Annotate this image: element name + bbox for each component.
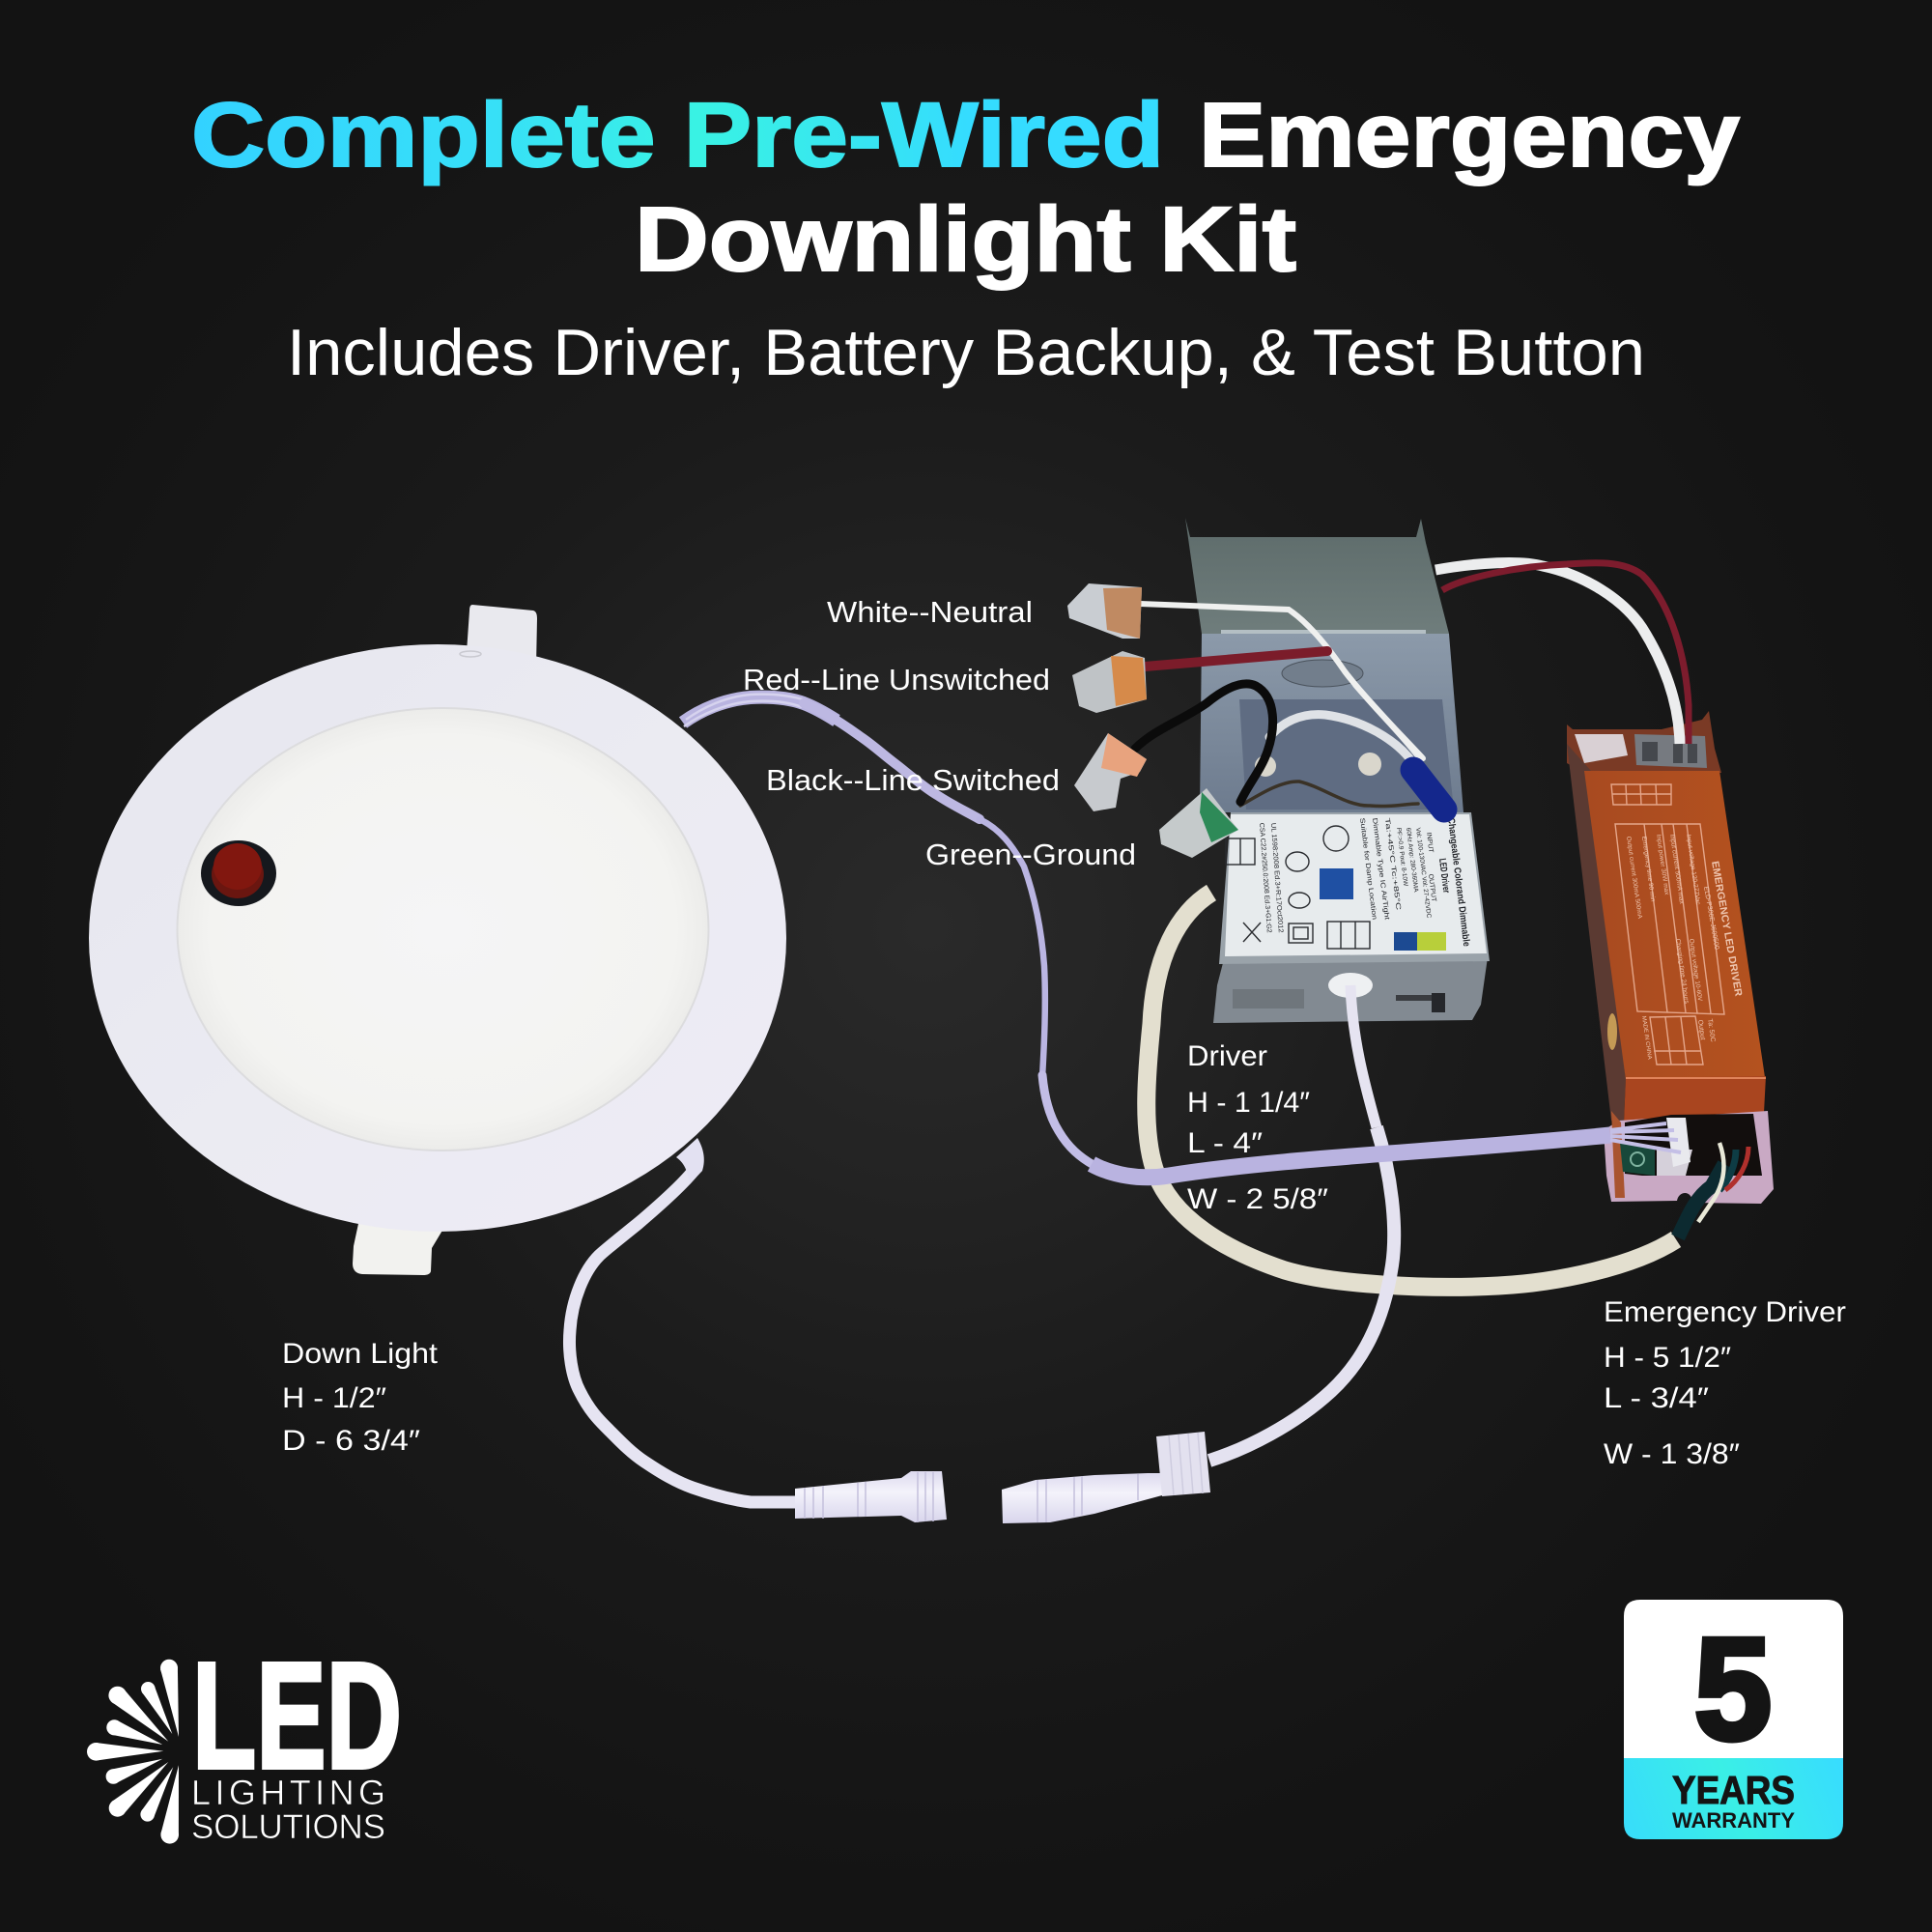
mounting tab top	[466, 605, 537, 667]
junction box driver	[1185, 518, 1490, 1023]
title: cyan part: Complete Pre-Wired	[191, 84, 1164, 186]
white neutral wire	[1140, 604, 1423, 758]
emergency driver	[1567, 711, 1774, 1237]
printed product name: Charging time 24 hours	[1674, 938, 1690, 1005]
logo sunburst icon	[87, 1660, 179, 1844]
printed product name: ELD-P306E-J600500	[1702, 886, 1719, 951]
subtitle: Includes Driver, Battery Backup, & Test Button	[287, 316, 1645, 389]
top tray	[1567, 711, 1721, 773]
blue logo	[1320, 868, 1353, 899]
grommet	[1328, 973, 1373, 998]
tail wires	[1678, 1143, 1748, 1237]
label text: 60Hz Amp: 280-360MA	[1405, 827, 1419, 894]
label symbols	[1226, 826, 1370, 949]
green connector	[1159, 788, 1238, 858]
downlight cable	[569, 1138, 797, 1502]
ground wire	[1240, 781, 1418, 807]
red line wire	[1145, 651, 1327, 667]
printed spec tables	[1611, 784, 1724, 1065]
label text: Dimmable Type IC AirTight	[1371, 817, 1390, 921]
label text: Suitable for Damp Location	[1358, 817, 1378, 921]
diffuser lens	[178, 708, 709, 1151]
back panel	[1185, 518, 1449, 634]
printed product name	[1625, 834, 1745, 1060]
label text: UL 1598:2008 Ed.3+R:17Oct2012	[1269, 823, 1284, 933]
green circuit board	[1620, 1143, 1655, 1176]
black connector	[1074, 733, 1147, 811]
label: white neutral: White--Neutral	[827, 595, 1033, 629]
label text: OUTPUT	[1427, 873, 1437, 903]
energy colour tag	[1394, 932, 1446, 951]
mounting tab bottom	[353, 1219, 449, 1275]
label: green ground: Green--Ground	[925, 838, 1136, 871]
label: red line: Red--Line Unswitched	[743, 663, 1050, 696]
label text: LED Driver	[1436, 858, 1451, 894]
dimensions: down light: Down Light	[282, 1338, 439, 1370]
logo wordmark LED: LED	[192, 1632, 402, 1801]
downlight panel	[89, 605, 786, 1275]
dimensions: down light: D - 6 3/4″	[282, 1425, 420, 1457]
dimensions: driver: H - 1 1/4″	[1187, 1087, 1310, 1119]
top label face	[1584, 771, 1765, 1080]
label: black line: Black--Line Switched	[766, 763, 1060, 797]
label text: Vol: 100-130VAC Vol: 27-42VDC	[1414, 827, 1432, 919]
printed product name: MADE IN CHINA	[1640, 1015, 1652, 1060]
logo wordmark SOLUTIONS: SOLUTIONS	[191, 1808, 385, 1846]
badge cyan bottom	[1624, 1758, 1843, 1839]
knockout oval	[1282, 660, 1363, 687]
printed product name: Output	[1696, 1019, 1706, 1040]
connector plug left	[795, 1471, 947, 1522]
title: second line: Downlight Kit	[635, 188, 1296, 291]
outer ring	[89, 644, 786, 1232]
label text: CSA C22.2#250.0:2008 Ed.3+G1:G2	[1258, 823, 1272, 933]
box lower section	[1213, 957, 1488, 1023]
top wires to emergency driver	[1435, 563, 1689, 744]
bottom end tray with notch	[1604, 1111, 1774, 1204]
title: white part: Emergency	[1199, 84, 1740, 186]
dimensions: driver	[1187, 1040, 1328, 1215]
printed product name: Input current 500mA max	[1668, 834, 1685, 905]
dimensions: driver: Driver	[1187, 1040, 1267, 1072]
dimensions: down light: H - 1/2″	[282, 1382, 386, 1414]
badge number: 5	[1694, 1607, 1772, 1770]
badge warranty: WARRANTY	[1672, 1808, 1795, 1833]
title	[191, 84, 1740, 291]
label text: Changeable Colorand Dimmable	[1445, 817, 1471, 948]
dimensions: driver: L - 4″	[1187, 1127, 1263, 1159]
white driver cable	[1209, 985, 1394, 1461]
metal box interior	[1200, 634, 1463, 812]
label text: PF:>0.9 Pout: 8-10W	[1395, 827, 1408, 888]
printed product name: Output current 300mA 500mA	[1625, 836, 1643, 920]
badge white top	[1624, 1600, 1843, 1758]
logo wordmark LIGHTING: LIGHTING	[191, 1773, 385, 1812]
red test button	[201, 840, 276, 906]
logo: LED Lighting Solutions	[87, 1632, 402, 1846]
dimensions: driver: W - 2 5/8″	[1187, 1183, 1328, 1215]
second white wire	[1355, 685, 1418, 756]
connector plug right	[1002, 1473, 1162, 1523]
front face	[1624, 1076, 1766, 1122]
printed product name: Output voltage 10-60V	[1688, 938, 1703, 1002]
red connector	[1072, 651, 1147, 713]
label text: Ta:+45°C Tc:+85°C	[1383, 817, 1403, 911]
printed product name: EMERGENCY LED DRIVER	[1709, 860, 1745, 998]
cream emergency cable	[1147, 893, 1676, 1287]
white connector	[1666, 1118, 1690, 1167]
dimensions: emergency driver: H - 5 1/2″	[1604, 1342, 1731, 1374]
dimensions: down light	[282, 1338, 439, 1457]
printed product name: Input voltage 120-277Vac	[1685, 834, 1701, 906]
blue cap	[1413, 770, 1444, 810]
dimensions: emergency driver	[1604, 1296, 1846, 1470]
printed product name: Ta: 50C	[1706, 1018, 1716, 1042]
keyholes	[1358, 753, 1381, 776]
label text	[1258, 817, 1471, 948]
dimensions: emergency driver: Emergency Driver	[1604, 1296, 1846, 1328]
label text: INPUT	[1425, 832, 1435, 854]
internal wiring and connectors	[1135, 604, 1444, 810]
black wire	[1135, 684, 1273, 802]
warranty badge	[1624, 1600, 1843, 1839]
badge years: YEARS	[1672, 1768, 1795, 1812]
dimensions: emergency driver: L - 3/4″	[1604, 1382, 1709, 1414]
dimensions: emergency driver: W - 1 3/8″	[1604, 1438, 1740, 1470]
internal white cable	[1269, 715, 1413, 763]
side wall	[1567, 744, 1626, 1121]
printed product name: Input power 30W max	[1655, 834, 1670, 896]
printed product name: Emergency time 90 min	[1640, 836, 1657, 902]
labels: wire colours	[743, 595, 1136, 871]
lavender ribbon cable	[683, 695, 1681, 1178]
box front slot	[1396, 995, 1444, 1001]
terminal block	[1634, 734, 1707, 768]
connector collar	[1156, 1432, 1210, 1496]
driver label plate	[1225, 814, 1487, 956]
white connector	[1067, 583, 1142, 639]
